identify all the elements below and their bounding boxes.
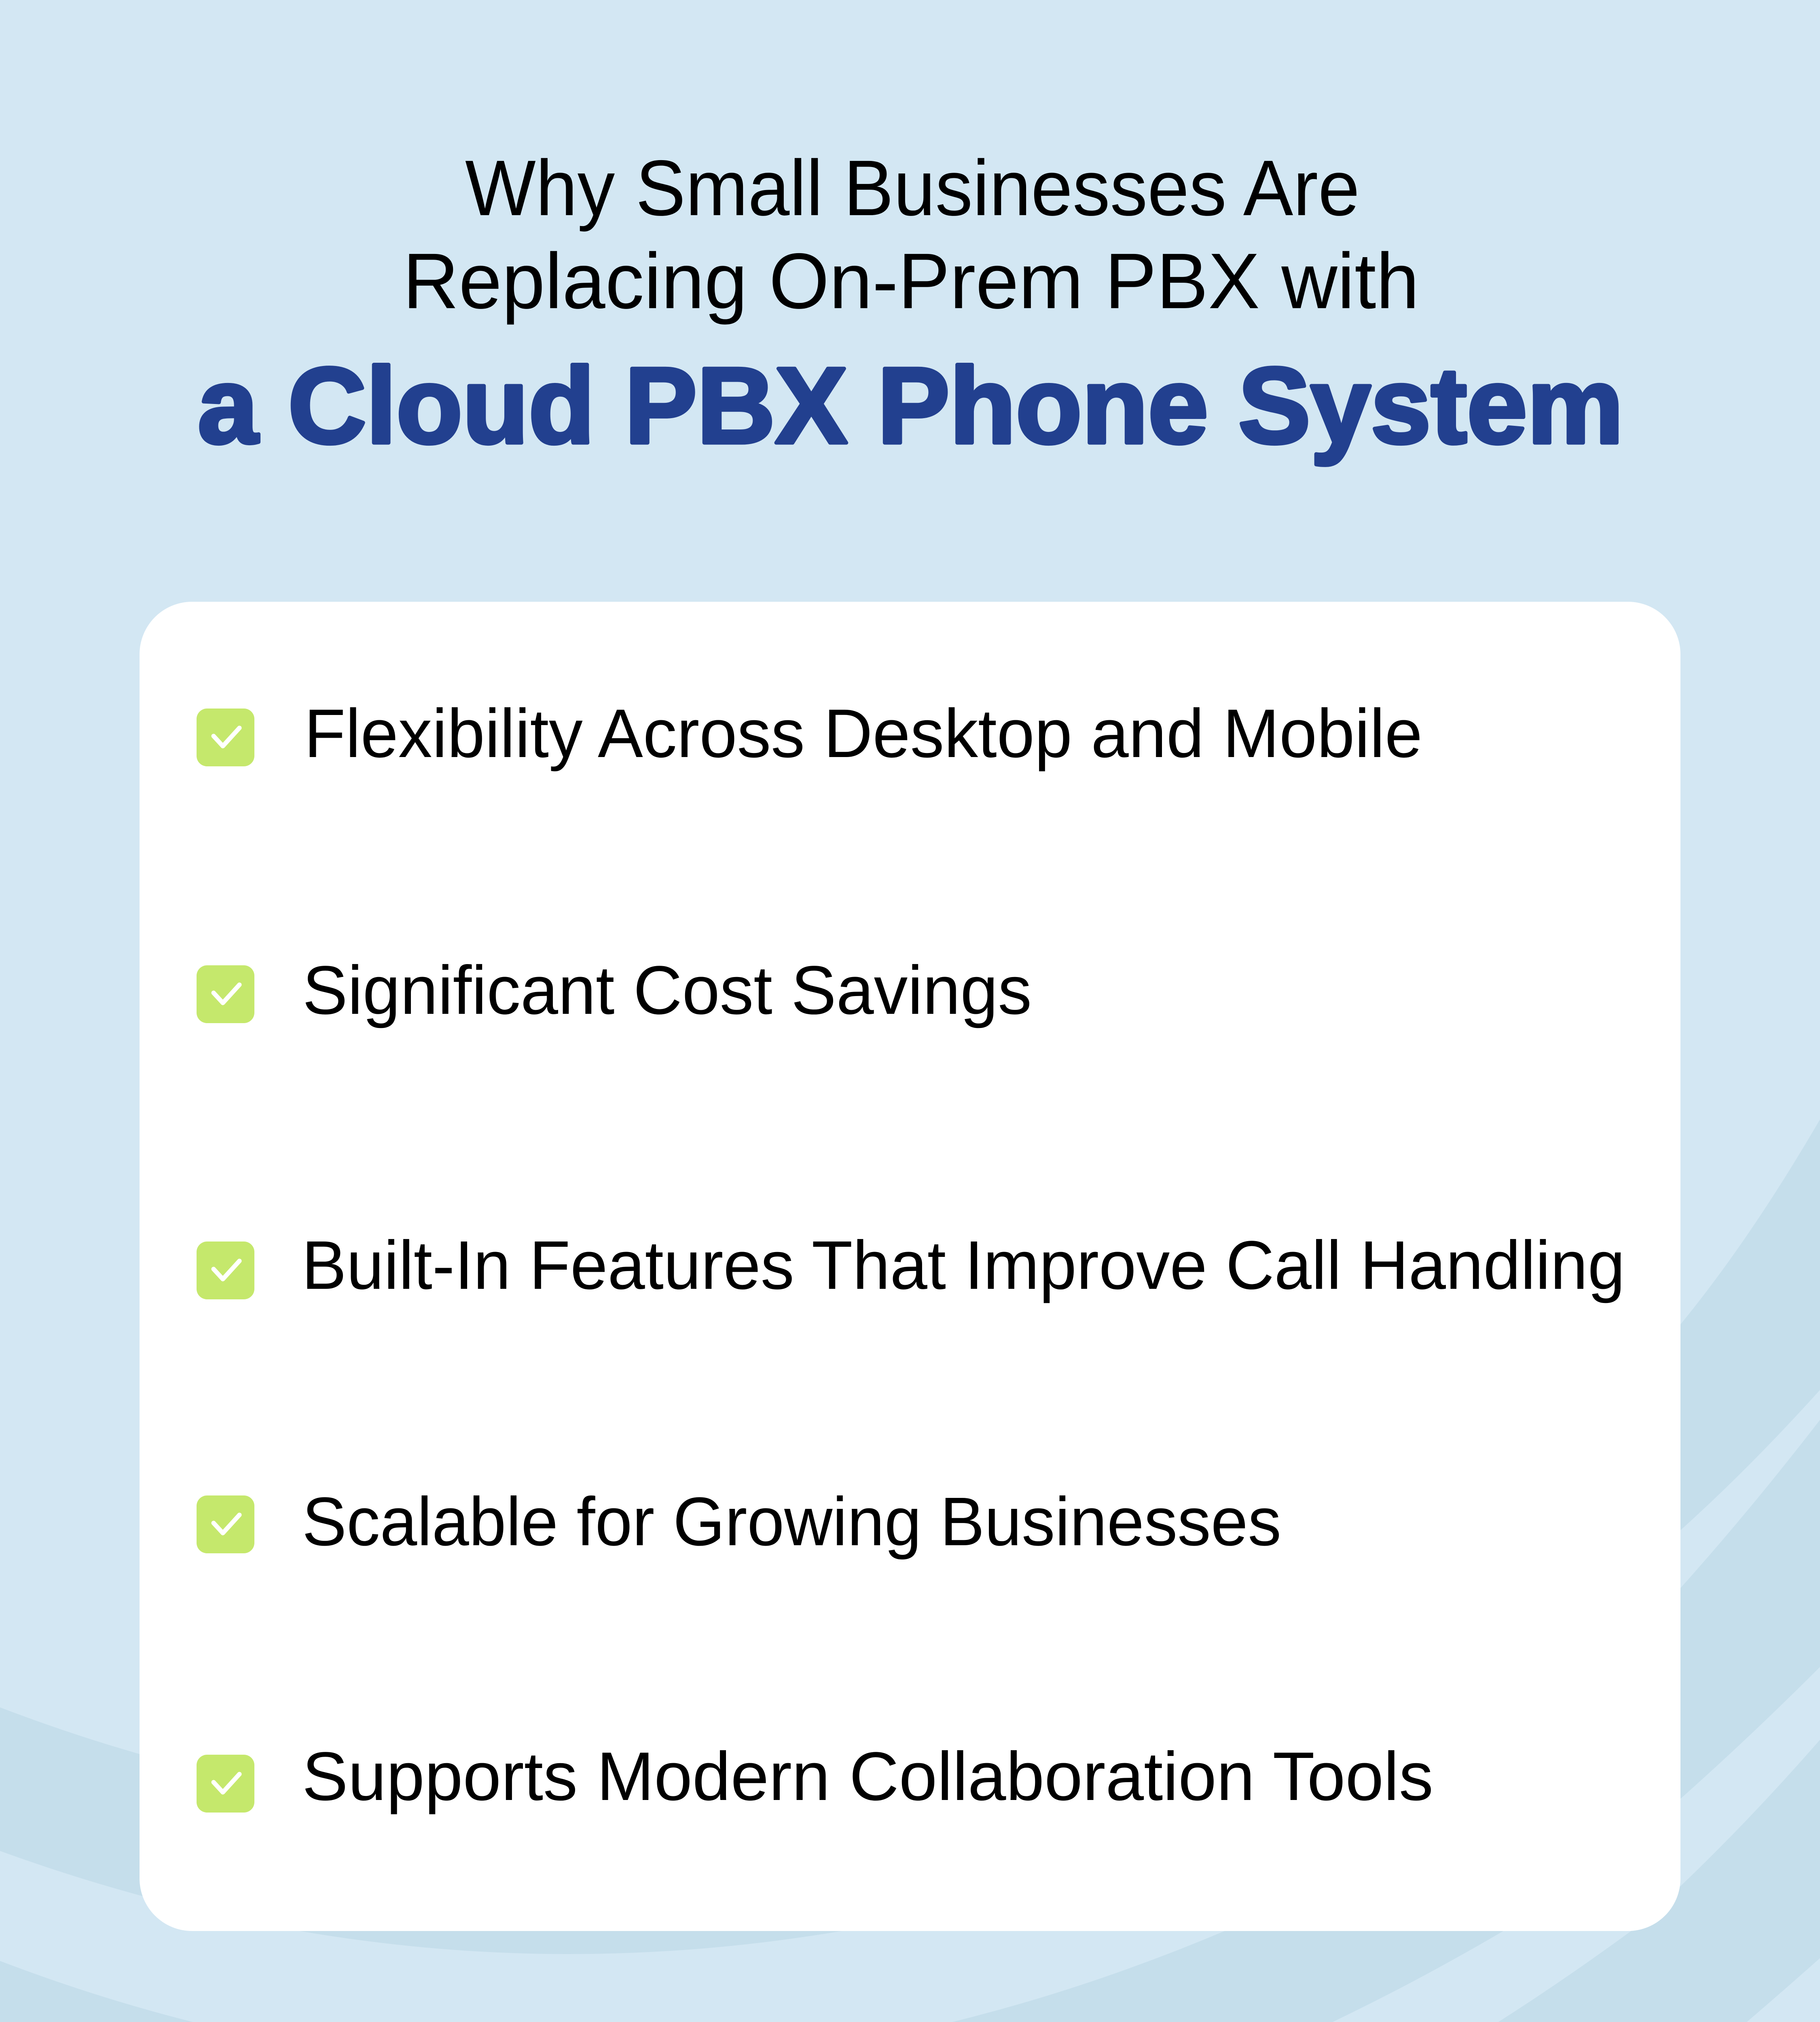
list item: cost savings: Significant Cost Savings	[303, 952, 1032, 1029]
title	[198, 144, 1623, 466]
title line 3 highlighted: a Cloud PBX Phone System	[198, 345, 1623, 466]
title line 1: Why Small Businesses Are	[465, 144, 1360, 232]
list item: collaboration: Supports Modern Collaboration Tools	[302, 1738, 1433, 1815]
list item: call handling: Built-In Features That Improve Call Handling	[302, 1227, 1625, 1304]
list item: scalable: Scalable for Growing Businesses	[302, 1483, 1281, 1560]
title line 2: Replacing On-Prem PBX with	[403, 237, 1419, 325]
panel: benefits card	[140, 602, 1680, 1931]
list item: flexibility: Flexibility Across Desktop and Mobile	[304, 695, 1422, 772]
